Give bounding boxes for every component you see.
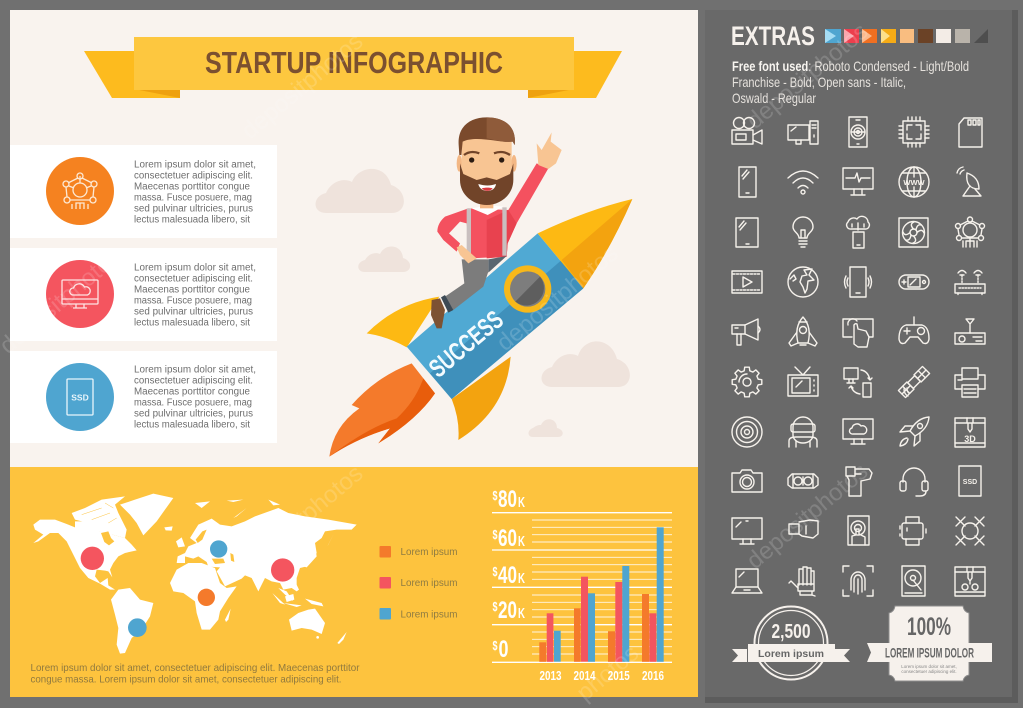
- icon: handheld console: [899, 275, 929, 289]
- badge: 100%: Lorem ipsum dolor sit amet,: [901, 664, 957, 669]
- icon: tablet touch: [848, 516, 869, 545]
- man: head: [457, 117, 517, 208]
- clouds: [316, 169, 630, 437]
- axis labels: $: [492, 638, 498, 653]
- icon: projector: [955, 319, 985, 344]
- axis labels: 2016: [642, 668, 664, 683]
- badge: 2,500: Lorem ipsum: [758, 648, 824, 660]
- rocket flame: [329, 363, 435, 457]
- icon: hand with smartwatch: [846, 467, 872, 496]
- badge: 100%: [867, 606, 992, 681]
- watermarks: depositphotos: [492, 240, 623, 357]
- colour swatches: [825, 29, 988, 43]
- icon: 3D printer: 3D: [964, 434, 976, 444]
- icon: printer: [955, 368, 985, 397]
- icon: memory card: [959, 118, 982, 147]
- icon: cloud download phone: [847, 216, 869, 248]
- icon: game controller: [899, 317, 929, 344]
- icon: network circle: [46, 157, 114, 225]
- icon: SSD drive: [959, 466, 981, 496]
- axis labels: 2014: [574, 668, 596, 683]
- font credits: [732, 58, 969, 106]
- text block 1: Lorem ipsum dolor sit amet,: [134, 160, 256, 170]
- icon: network wheel: [956, 217, 984, 247]
- chart legend: Lorem ipsum: [400, 547, 458, 558]
- icon: robot hand: [789, 567, 815, 596]
- icon: headset: [900, 468, 928, 496]
- title ribbon: [84, 37, 622, 98]
- axis labels: K: [518, 605, 525, 622]
- icon: cloud monitor: [843, 419, 873, 444]
- icon: 3D printing gears: [955, 567, 985, 596]
- text block 3: lectus malesuada libero, sit: [134, 420, 250, 430]
- icon: cooling fan: [899, 218, 928, 247]
- icon: pulse monitor: [843, 168, 873, 195]
- axis labels: [492, 486, 664, 683]
- badge: 2,500: 2,500: [772, 621, 810, 643]
- icon: fingerprint scan: [843, 566, 873, 596]
- icon: smartwatch: [900, 517, 926, 545]
- map caption: congue massa. Lorem ipsum dolor sit amet, consectetuer adipiscing elit.: [30, 674, 342, 686]
- icon: cloud monitor circle: [46, 260, 114, 328]
- icon: smartphone: [739, 167, 756, 197]
- text block 2: Lorem ipsum dolor sit amet,: [134, 262, 256, 274]
- axis labels: 2015: [608, 668, 630, 683]
- axis labels: 60: [498, 525, 517, 552]
- map caption: [30, 662, 360, 686]
- icon: television: [788, 367, 818, 396]
- axis labels: 80: [498, 486, 517, 513]
- text block 3: massa. Fusce posuere, mag: [134, 398, 252, 408]
- icon: 3D printer: [955, 418, 985, 447]
- bar chart: [492, 486, 672, 683]
- icon: gear: [732, 367, 762, 397]
- icon: SSD circle: SSD: [71, 392, 89, 402]
- axis labels: $: [492, 599, 498, 614]
- icon: wrist watch: [789, 520, 818, 538]
- panel: main infographic: [10, 10, 698, 697]
- text block 1: consectetuer adipiscing elit.: [134, 170, 253, 182]
- text block 3: sed pulvinar ultricies, purus: [134, 408, 253, 420]
- icon: earth: [788, 267, 818, 297]
- axis labels: $: [492, 564, 498, 579]
- icon: laptop: [732, 569, 762, 593]
- man: leg: [431, 245, 488, 328]
- watermarks: depositphotos: [742, 18, 873, 135]
- badge: 2,500: [732, 606, 850, 680]
- text block 1: [134, 160, 256, 226]
- icon: SSD drive: SSD: [963, 479, 977, 486]
- icon: tablet: [736, 218, 758, 247]
- text block 2: massa. Fusce posuere, mag: [134, 296, 252, 306]
- map: Americas: [33, 494, 173, 654]
- text block 2: lectus malesuada libero, sit: [134, 318, 250, 328]
- rocket label: SUCCESS: [423, 304, 509, 383]
- map: Eurasia, Africa, Oceania: [170, 500, 357, 644]
- text block 2: consectetuer adipiscing elit.: [134, 274, 253, 284]
- title: STARTUP INFOGRAPHIC: [205, 45, 503, 80]
- badge: 100%: 100%: [907, 613, 951, 641]
- world map: [33, 494, 357, 654]
- icon: vibrating phone: [844, 267, 872, 297]
- chart legend: Lorem ipsum: [400, 578, 458, 589]
- icon: photo camera: [732, 470, 762, 492]
- icon: space rocket: [789, 317, 817, 346]
- axis labels: 0: [498, 636, 508, 663]
- text block 1: sed pulvinar ultricies, purus: [134, 204, 253, 214]
- text block 3: Lorem ipsum dolor sit amet,: [134, 364, 256, 376]
- icon: satellite: [898, 366, 930, 398]
- icon: megaphone: [732, 319, 760, 345]
- watermarks: depositphotos: [237, 28, 368, 145]
- watermarks: photos: [572, 640, 644, 707]
- card: item 3: [10, 351, 277, 443]
- badge: 100%: consectetuer adipiscing elit.: [901, 669, 957, 674]
- icon: VR headset user: [789, 417, 817, 447]
- panel: yellow data band: [10, 467, 698, 697]
- axis labels: 20: [498, 597, 517, 624]
- axis labels: 2013: [540, 668, 562, 683]
- text block 3: consectetuer adipiscing elit.: [134, 376, 253, 386]
- icon: phone fingerprint: [849, 117, 867, 147]
- text block 1: lectus malesuada libero, sit: [134, 214, 250, 226]
- card: item 2: [10, 248, 277, 341]
- icon: quadcopter drone: [956, 517, 984, 545]
- icon: target: [732, 417, 762, 447]
- icon: movie camera: [732, 118, 762, 144]
- chart legend: [380, 546, 458, 620]
- icon: touch tablet: [843, 319, 873, 347]
- card: item 1: [10, 145, 277, 238]
- chart legend: Lorem ipsum: [400, 610, 458, 620]
- icon: VR goggles: [788, 474, 818, 488]
- text block 2: [134, 262, 256, 328]
- icon: wifi: [788, 171, 818, 194]
- axis labels: $: [492, 488, 498, 503]
- panel: extras: [705, 10, 1012, 697]
- map caption: Lorem ipsum dolor sit amet, consectetuer adipiscing elit. Maecenas porttitor: [30, 662, 360, 674]
- axis labels: $: [492, 527, 498, 542]
- icon: light bulb: [793, 217, 813, 247]
- icon: www globe: WWW: [903, 178, 926, 187]
- axis labels: K: [518, 533, 525, 550]
- text block 1: massa. Fusce posuere, mag: [134, 192, 252, 204]
- text block 3: [134, 364, 256, 430]
- icon grid: [732, 117, 985, 596]
- icon: satellite dish: [957, 167, 981, 196]
- icon: launching rocket: [900, 417, 929, 446]
- icon: desktop monitor: [732, 518, 762, 544]
- map markers: [81, 540, 294, 637]
- icon: device sync: [844, 368, 872, 397]
- icon: www globe: [899, 167, 929, 197]
- icon: desktop computer: [788, 121, 818, 144]
- rocket: [329, 199, 632, 457]
- axis labels: K: [518, 494, 525, 511]
- icon: video player: [732, 271, 762, 293]
- text block 2: sed pulvinar ultricies, purus: [134, 306, 253, 318]
- icon: hard disk: [902, 566, 925, 596]
- man: upper body: [437, 163, 548, 273]
- font credits: Oswald - Regular: [732, 90, 816, 106]
- icon: processor chip: [899, 117, 929, 147]
- extras heading: EXTRAS: [731, 21, 815, 51]
- font credits: Franchise - Bold, Open sans - Italic,: [732, 74, 906, 90]
- text block 1: Maecenas porttitor congue: [134, 182, 250, 192]
- man: raised hand: [537, 132, 562, 169]
- text block 3: Maecenas porttitor congue: [134, 386, 250, 398]
- watermarks: depositphotos: [237, 460, 368, 577]
- axis labels: K: [518, 570, 525, 587]
- icon: SSD circle: [46, 363, 114, 431]
- illustration: man on rocket: [329, 117, 632, 457]
- font credits: Free font used: Roboto Condensed - Light/Bold: [732, 58, 969, 74]
- text block 2: Maecenas porttitor congue: [134, 284, 250, 296]
- watermarks: depositphotos: [742, 458, 873, 575]
- axis labels: 40: [498, 562, 517, 589]
- icon: wifi router: [955, 270, 985, 295]
